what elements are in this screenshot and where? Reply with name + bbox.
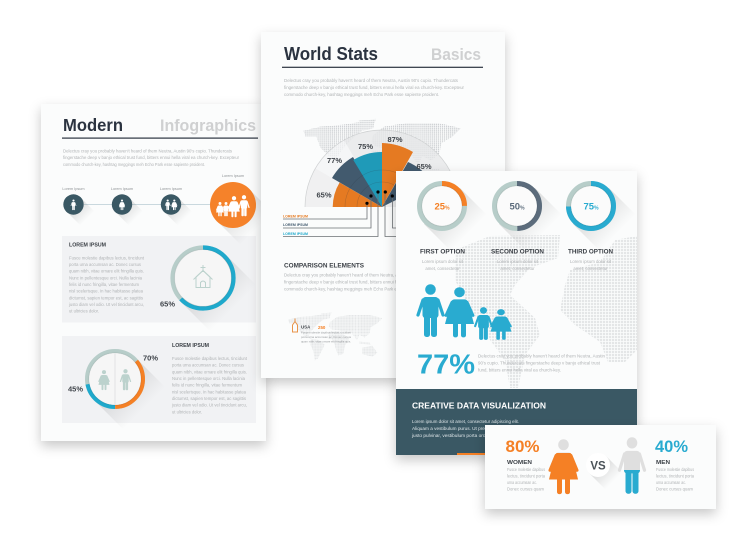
world map with polar chart: 65%	[316, 190, 332, 200]
panel: Modern Infographics page	[41, 104, 274, 441]
card body text: Nunc in pellentesque orci. Nulla lacinia	[172, 376, 246, 381]
statistic description: Delectus cray you probably haven't heard of them Neutra, Austin	[478, 354, 606, 358]
card body text: ut ultricies dolor.	[69, 309, 99, 314]
leader lines and legend: LOREM IPSUM	[283, 232, 308, 236]
comparison paragraph: commodo church-key, hashtag meggings meh Echo Park esse sapiente proident.	[284, 286, 439, 292]
card body text: nisl scelerisque. In hac habitasse platea	[69, 289, 144, 294]
panel: women vs men comparison	[485, 425, 716, 509]
card body text: justo diam vel odio. Ut vel tincidunt arcu,	[171, 403, 247, 408]
intro paragraph	[284, 78, 465, 97]
USA data callout: Fusce molestie dapibus lectus, tincidunt	[301, 330, 351, 334]
title: Infographics: Infographics	[160, 116, 256, 135]
card body text: Nunc in pellentesque orci. Nulla lacinia	[69, 275, 143, 280]
dotted world map	[304, 119, 460, 170]
VS badge	[586, 453, 624, 492]
timeline step 3	[160, 187, 194, 228]
timeline step 2	[111, 187, 145, 228]
timeline step 3: Lorem Ipsum	[160, 187, 182, 191]
USA data callout: porta urna accumsan ac. Donec cursus	[301, 335, 352, 339]
men label and text: Donec cursus quam	[656, 486, 693, 492]
donut: first option 25%	[420, 184, 488, 252]
women label and text: WOMEN	[507, 460, 532, 466]
icon: church	[194, 265, 212, 288]
option labels: THIRD OPTION	[568, 250, 613, 256]
option labels: amet, consectetur	[500, 266, 535, 271]
option labels	[420, 250, 613, 271]
card body text: quam nibh, vitae ornare elit fringilla quis.	[69, 269, 144, 274]
comparison paragraph: Delectus cray you probably haven't heard of them Neutra, Austin 90's cupio. Thundercats	[284, 272, 454, 278]
intro paragraph: Delectus cray you probably haven't heard of them Neutra, Austin 90's cupio. Thundercats	[284, 78, 458, 83]
card heading: LOREM IPSUM	[69, 242, 106, 248]
timeline step 4: family circle: Lorem Ipsum	[222, 174, 244, 178]
card body text: Fusce molestie dapibus lectus, tincidunt	[69, 256, 145, 260]
polar wedges	[332, 143, 422, 207]
men label and text: urna accumsan ac.	[656, 480, 686, 485]
card body text: porta urna accumsan ac. Donec cursus	[69, 262, 141, 267]
women label and text: lectus, tincidunt porta	[507, 474, 546, 478]
label: 70%: 70%	[143, 354, 158, 362]
intro paragraph: commodo church-key, hashtag meggings meh Echo Park esse sapiente proident.	[284, 92, 439, 97]
men label and text	[656, 460, 695, 492]
USA data callout: USA	[301, 324, 311, 330]
title: Basics: Basics	[431, 45, 481, 64]
percentage labels: 87%	[387, 135, 403, 144]
VS badge: VS	[590, 460, 606, 472]
icon: man	[120, 369, 130, 390]
grey card: church statistic	[62, 236, 256, 331]
banner: creative data visualization: Lorem ipsum dolor sit amet, consectetur adipiscing elit.	[412, 419, 519, 424]
leader lines and legend	[283, 190, 400, 236]
banner: creative data visualization	[396, 389, 637, 455]
women label and text: Donec cursus quam	[507, 486, 544, 492]
card body text	[68, 256, 145, 314]
label: 45%: 45%	[68, 384, 83, 394]
donut: third option 75%: 75%	[583, 202, 599, 212]
card body text: porta urna accumsan ac. Donec cursus	[172, 363, 244, 368]
timeline step 1	[62, 187, 96, 228]
statistic description	[478, 354, 606, 372]
option labels: FIRST OPTION	[420, 250, 465, 256]
label: 65%: 65%	[160, 300, 175, 308]
women label and text: Fusce molestie dapibus	[507, 467, 545, 472]
men label and text: Fusce molestie dapibus	[656, 467, 694, 472]
title: World Stats: World Stats	[284, 44, 378, 64]
card body text: quam nibh, vitae ornare elit fringilla quis.	[172, 369, 247, 374]
option labels: SECOND OPTION	[491, 250, 544, 256]
women label and text: urna accumsan ac.	[507, 480, 537, 485]
banner: creative data visualization: justo pulvinar, vestibulum porta orci in lacinia nunc.	[411, 433, 519, 438]
small world map	[288, 313, 382, 360]
pictogram: woman 80%	[549, 439, 578, 494]
world map with polar chart	[283, 119, 460, 237]
dotted world map	[455, 235, 637, 388]
heading: Comparison Elements: COMPARISON ELEMENTS	[284, 262, 364, 270]
timeline step 4: family circle	[210, 174, 274, 246]
world map with polar chart: 75%	[358, 142, 373, 151]
leader lines and legend: LOREM IPSUM	[283, 223, 308, 227]
statistic description: 90's cupio. Thundercats fingerstache deep v banjo ethical trust	[478, 360, 601, 366]
donut: third option 75%	[568, 184, 637, 252]
donut: second option 50%: 50%	[509, 202, 525, 212]
comparison paragraph: fingerstache deep v banjo ethical trust fund, bitters ennui hella viral ea church-key. Excepteur	[284, 280, 465, 284]
comparison paragraph	[284, 272, 465, 292]
icon: woman	[98, 370, 110, 390]
chart background sectors	[305, 130, 459, 207]
option labels: Lorem ipsum dolor sit	[497, 259, 539, 264]
option labels: amet, consectetur	[425, 266, 460, 271]
donut: 65%	[172, 248, 234, 308]
world map with polar chart: 77%	[327, 156, 342, 165]
panel: options page	[396, 171, 637, 455]
women label and text	[507, 460, 546, 492]
panel: World Stats page	[261, 32, 505, 378]
title: Modern: Modern	[63, 115, 123, 135]
card body text: ut ultricies dolor.	[172, 409, 202, 414]
men label and text: lectus, tincidunt porta	[656, 474, 695, 478]
statistic: 80% women: 80%	[506, 437, 540, 456]
pictogram: man 40%	[620, 437, 644, 494]
card body text: felis id nunc fringilla, vitae fermentum	[69, 282, 139, 287]
option labels: Lorem ipsum dolor sit	[422, 259, 464, 264]
donut: first option 25%: 25%	[434, 202, 450, 212]
card body text: justo diam vel odio. Ut vel tincidunt arcu,	[68, 302, 144, 307]
USA data callout	[292, 318, 352, 344]
intro paragraph: fingerstache deep v banjo ethical trust fund, bitters ennui hella viral ea church-key. Excepteur	[284, 85, 465, 90]
leader lines and legend: LOREM IPSUM	[283, 215, 308, 219]
world map with polar chart: 65%	[416, 162, 432, 171]
intro paragraph: commodo church-key, hashtag meggings meh Echo Park esse sapiente proident.	[63, 162, 205, 167]
option labels: amet, consectetur	[573, 266, 608, 271]
grey card: gender statistic	[62, 336, 256, 430]
donut: second option 50%	[494, 184, 563, 252]
card body text: dictumst, sapien tempor est, ac sagittis	[69, 295, 143, 300]
intro paragraph	[63, 148, 240, 167]
card body text: dictumst, sapien tempor est, ac sagittis	[172, 396, 246, 401]
card body text	[171, 356, 248, 414]
statistic: 40% men: 40%	[655, 437, 688, 456]
card body text: nisl scelerisque. In hac habitasse platea	[172, 389, 247, 394]
statistic description: fund, bitters ennui hella viral ea church-key.	[478, 368, 561, 372]
card body text: Fusce molestie dapibus lectus, tincidunt	[172, 356, 248, 361]
timeline connector	[84, 204, 215, 206]
card body text: felis id nunc fringilla, vitae fermentum	[172, 383, 242, 388]
USA data callout: quam nibh, vitae ornare elit fringilla quis.	[301, 340, 351, 344]
intro paragraph: Delectus cray you probably haven't heard of them Neutra, Austin 90's cupio. Thundercats	[63, 148, 232, 154]
men label and text: MEN	[656, 460, 670, 466]
statistic: 77%: 77%	[417, 348, 475, 380]
family pictogram	[418, 284, 511, 340]
intro paragraph: fingerstache deep v banjo ethical trust fund, bitters ennui hella viral ea church-key. Excepteur	[63, 155, 240, 160]
option labels: Lorem ipsum dolor sit	[570, 259, 612, 264]
timeline step 2: Lorem Ipsum	[111, 187, 133, 191]
card heading: LOREM IPSUM	[172, 343, 209, 349]
donut: 70% and 45%	[87, 351, 143, 407]
timeline step 1: Lorem Ipsum	[62, 187, 85, 191]
banner: creative data visualization: Aliquam a vestibulum purus. Ut pretium elit non est.	[412, 426, 519, 431]
banner: creative data visualization: CREATIVE DATA VISUALIZATION	[412, 400, 546, 410]
USA data callout: 250	[318, 325, 326, 330]
